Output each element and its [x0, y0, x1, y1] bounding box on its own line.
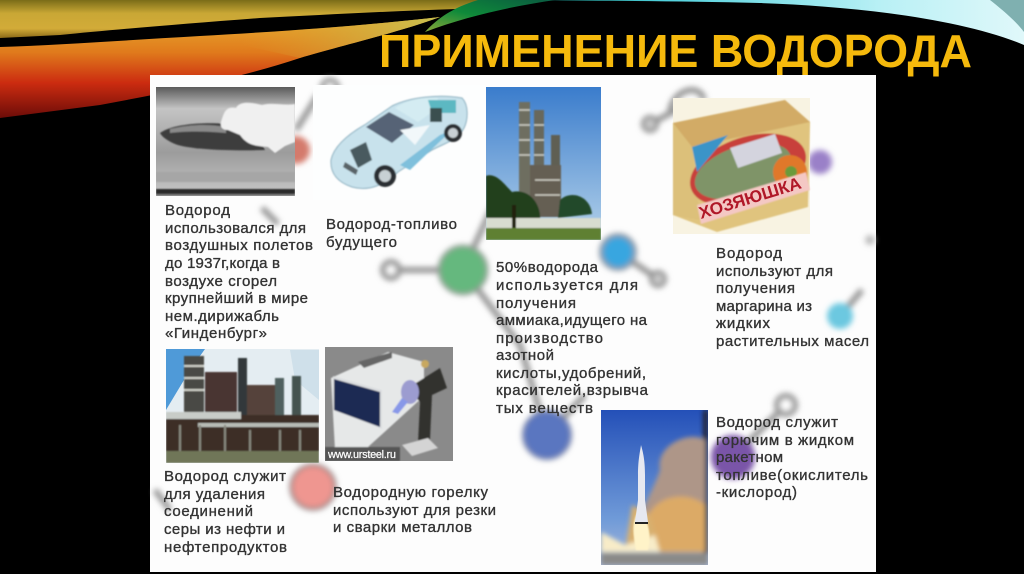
text: ammonia [496, 259, 649, 417]
text: airship: «Гинденбург» [165, 325, 267, 342]
photo: margarine package [673, 98, 815, 234]
text: fuel of the future [326, 216, 457, 251]
text: airship: воздухе сгорел [165, 273, 277, 290]
text: margarine: растительных масел [716, 333, 869, 350]
text: airship: Водород [165, 202, 230, 219]
text: ammonia: получения [496, 295, 576, 312]
text: ammonia: красителей,взрывча [496, 382, 649, 399]
text: desulfurization: серы из нефти и [164, 521, 285, 538]
text: desulfurization [164, 468, 287, 556]
text: margarine: используют для [716, 263, 833, 280]
text: rocket fuel: горючим в жидком [716, 432, 854, 449]
text: ammonia: азотной [496, 347, 554, 364]
text: margarine: жидких [716, 315, 770, 332]
text: desulfurization: нефтепродуктов [164, 539, 287, 556]
photo: ammonia plant towers [486, 87, 601, 240]
text: torch: и сварки металлов [333, 519, 472, 536]
text: airship: использовался для [165, 220, 306, 237]
text: ammonia: аммиака,идущего на [496, 312, 648, 329]
text: rocket fuel [716, 414, 868, 501]
text: desulfurization: для удаления [164, 486, 265, 503]
text: margarine: маргарина из [716, 298, 812, 315]
text: desulfurization: Водород служит [164, 468, 286, 485]
text: fuel of the future: будущего [326, 234, 397, 251]
package brand: ХОЗЯЮШКА [697, 174, 804, 223]
text: torch: Водородную горелку [333, 484, 488, 501]
website watermark: www.ursteel.ru [327, 449, 396, 461]
text: airship: до 1937г,когда в [165, 255, 280, 272]
text: torch: используют для резки [333, 502, 496, 519]
illustration: hydrogen car [313, 85, 485, 200]
text: ammonia: кислоты,удобрений, [496, 365, 646, 382]
text: ammonia: используется для [496, 277, 638, 294]
text: airship: нем.дирижабль [165, 308, 279, 325]
text: fuel of the future: Водород-топливо [326, 216, 457, 233]
decorative swoosh banner [0, 0, 1024, 118]
text: margarine [716, 245, 869, 350]
photo: burning airship Hindenburg [156, 87, 295, 196]
text: rocket fuel: ракетном [716, 449, 783, 466]
text: airship [165, 202, 313, 342]
photo: oil refinery [166, 349, 319, 463]
text: ammonia: тых веществ [496, 400, 593, 417]
text: ammonia: производство [496, 330, 603, 347]
molecule background pattern [155, 80, 875, 510]
text: margarine: получения [716, 280, 795, 297]
text: torch [333, 484, 496, 536]
text: ammonia: 50%водорода [496, 259, 599, 276]
photo: hydrogen torch [325, 347, 453, 461]
title: ПРИМЕНЕНИЕ ВОДОРОДА [379, 25, 972, 77]
panel: white content area [150, 75, 876, 572]
text: airship: крупнейший в мире [165, 290, 308, 307]
text: desulfurization: соединений [164, 503, 253, 520]
text: rocket fuel: Водород служит [716, 414, 838, 431]
text: rocket fuel: -кислород) [716, 484, 797, 501]
text: rocket fuel: топливе(окислитель [716, 467, 868, 484]
text: airship: воздушных полетов [165, 237, 313, 254]
photo: rocket launch [601, 410, 708, 565]
text: margarine: Водород [716, 245, 782, 262]
